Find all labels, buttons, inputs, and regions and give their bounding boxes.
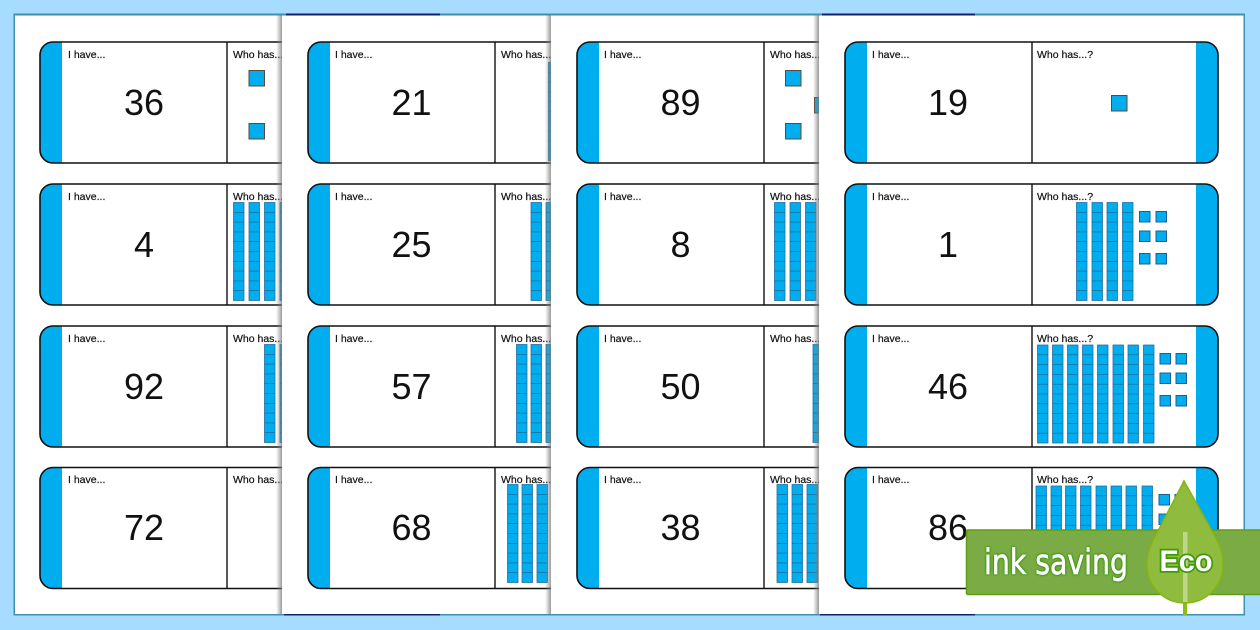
card: 72: Who has...?: [233, 474, 289, 486]
card: 92: [39, 325, 282, 448]
sheet 3: [551, 14, 819, 616]
card: 1: [845, 184, 1218, 305]
card: 25: [307, 183, 551, 306]
card: 89: I have...: [604, 49, 641, 61]
card: 68: [307, 466, 551, 590]
banner text: ink saving: [984, 543, 1128, 583]
card: 50: [576, 325, 819, 448]
card: 50: 50: [660, 366, 701, 407]
card: 57: 57: [391, 366, 432, 407]
card: 68: 68: [391, 507, 432, 548]
card: 8: I have...: [604, 191, 641, 203]
card: 72: I have...: [68, 474, 105, 486]
sheet 4: [819, 14, 1245, 616]
card: 36: Who has...?: [233, 49, 289, 61]
card: 1: I have...: [872, 191, 909, 203]
card: 19: I have...: [872, 49, 909, 61]
card: 92: 92: [124, 366, 164, 407]
card: 72: [39, 466, 282, 590]
card: 92: I have...: [68, 333, 105, 345]
card: 38: Who has...?: [770, 474, 826, 486]
card: 46: I have...: [872, 333, 909, 345]
card: 50: Who has...?: [770, 333, 826, 345]
card: 19: 19: [928, 82, 968, 123]
sheet 1: [14, 14, 282, 616]
card: 36: 36: [124, 82, 164, 123]
card: 19: Who has...?: [1037, 49, 1093, 61]
card: 50: I have...: [604, 333, 641, 345]
card: 46: Who has...?: [1037, 333, 1093, 345]
card: 86: I have...: [872, 474, 909, 486]
card: 1: Who has...?: [1037, 191, 1093, 203]
card: 21: Who has...?: [501, 49, 557, 61]
card: 57: [307, 325, 551, 448]
card: 4: Who has...?: [233, 191, 289, 203]
card: 4: [39, 183, 282, 306]
sheet 2 to 3 shadow: [545, 15, 551, 614]
card: 86: 86: [928, 507, 968, 548]
card: 21: I have...: [335, 49, 372, 61]
sheet 3 to 4 shadow: [813, 15, 819, 614]
card: 46: [845, 326, 1218, 447]
card: 68: Who has...?: [501, 474, 557, 486]
card: 1: 1: [938, 224, 958, 265]
card: 57: I have...: [335, 333, 372, 345]
card: 86: Who has...?: [1037, 474, 1093, 486]
card: 38: 38: [660, 507, 701, 548]
card: 92: Who has...?: [233, 333, 289, 345]
card: 36: I have...: [68, 49, 105, 61]
card: 38: [576, 466, 819, 590]
card: 89: 89: [660, 82, 701, 123]
card: 89: Who has...?: [770, 49, 826, 61]
card: 38: I have...: [604, 474, 641, 486]
card: 19: [845, 42, 1218, 163]
card: 8: Who has...?: [770, 191, 826, 203]
sheet 2: [282, 14, 551, 616]
eco label: Eco: [1160, 545, 1212, 578]
card: 68: I have...: [335, 474, 372, 486]
card: 21: [307, 41, 551, 164]
card: 8: 8: [670, 224, 691, 265]
icon: eco leaf drop: [1147, 481, 1223, 615]
card: 8: [576, 183, 819, 306]
card: 4: I have...: [68, 191, 105, 203]
eco banner: [966, 481, 1260, 615]
card: 4: 4: [134, 224, 154, 265]
card: 57: Who has...?: [501, 333, 557, 345]
card: 25: I have...: [335, 191, 372, 203]
card: 25: Who has...?: [501, 191, 557, 203]
card: 89: [576, 41, 819, 164]
card: 21: 21: [391, 82, 432, 123]
card: 25: 25: [391, 224, 432, 265]
card: 46: 46: [928, 366, 968, 407]
sheet 1 to 2 shadow: [276, 15, 282, 614]
card: 72: 72: [124, 507, 164, 548]
card: 86: [845, 468, 1218, 588]
card: 36: [39, 41, 282, 164]
